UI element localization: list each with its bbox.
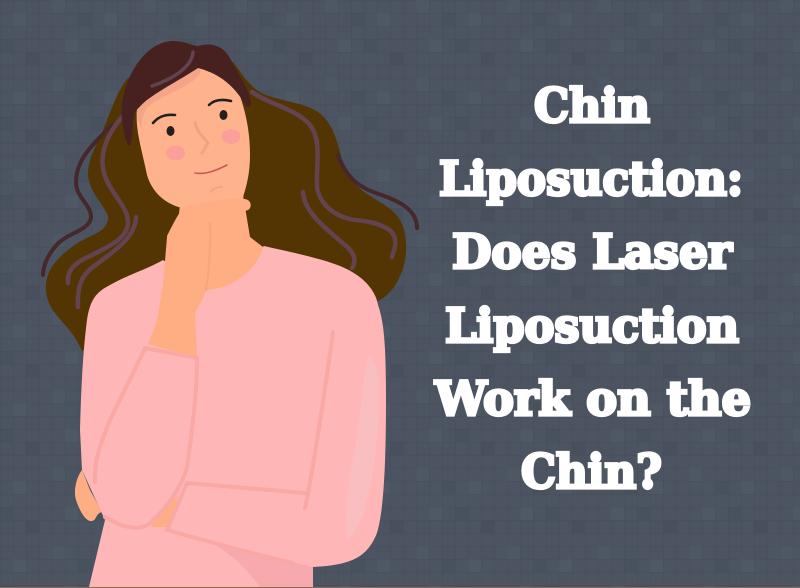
mouth [195, 165, 227, 173]
cheek right [222, 129, 240, 144]
chin crease [211, 187, 222, 192]
sleeve highlight [346, 357, 379, 540]
title line 6: Chin? [521, 445, 662, 500]
title line 3: Does Laser [452, 225, 733, 280]
sweater body [80, 246, 386, 587]
title line 2: Liposuction: [439, 152, 743, 207]
illustration: thinking woman [43, 41, 417, 587]
fingers [167, 199, 251, 262]
skin under cuff [150, 495, 178, 527]
forehead shadow [137, 68, 201, 130]
hand crease [206, 223, 210, 290]
eye right [220, 110, 228, 120]
fringe highlight [152, 52, 193, 86]
front dark hair [122, 41, 251, 146]
title line 1: Chin [534, 79, 650, 134]
forearm skin [148, 223, 210, 358]
loose strands [43, 125, 417, 275]
title [434, 79, 751, 500]
right eyebrow [153, 115, 175, 123]
nose [195, 123, 208, 153]
sleeve shadow [207, 540, 313, 587]
back hair [46, 62, 406, 351]
neck [170, 195, 263, 290]
title line 5: Work on the [434, 372, 751, 427]
hair highlights [68, 92, 395, 307]
left eyebrow [209, 100, 231, 105]
title line 4: Liposuction [445, 299, 739, 354]
sweater cuff and arm lines [95, 332, 333, 563]
eye left [166, 126, 174, 136]
cheek left [166, 146, 185, 160]
face [137, 68, 250, 208]
hand fingers behind arm [75, 470, 102, 521]
